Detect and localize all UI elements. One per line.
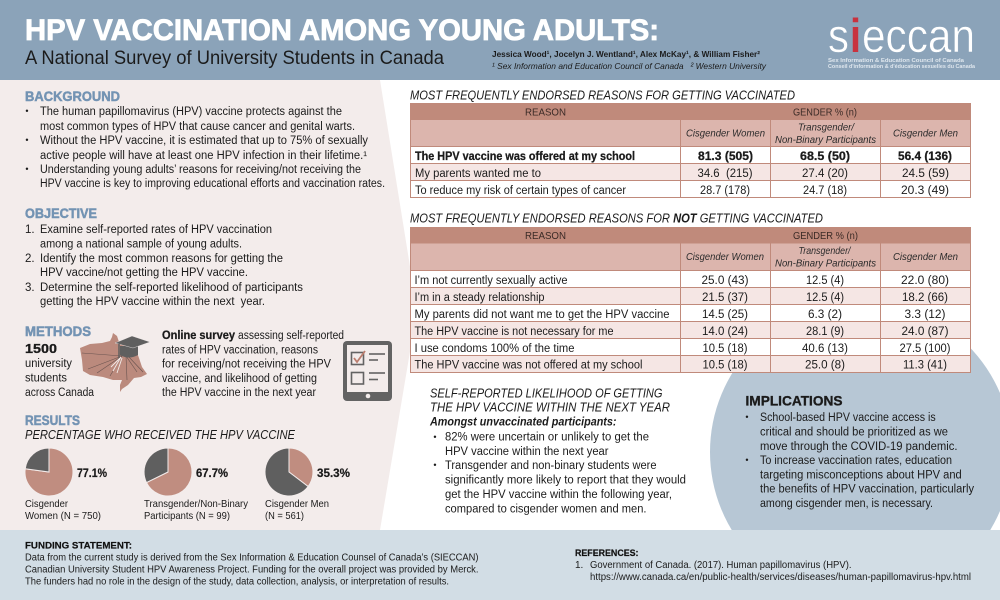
table: reasons for not getting vaccinated: 12.5 (4) bbox=[806, 292, 844, 304]
text block: background bullets: Understanding young adults’ reasons for receiving/not receiving the bbox=[40, 164, 361, 176]
text block: implications bullets bbox=[745, 412, 974, 510]
text block: background bullets: HPV vaccine is key to improving educational efforts and vaccination rates. bbox=[40, 178, 385, 190]
text block: implications bullets: • bbox=[745, 455, 749, 465]
text block: likelihood findings: get the HPV vaccine within the following year, bbox=[445, 489, 672, 501]
table: reasons for getting vaccinated: GENDER % (n) bbox=[793, 107, 857, 119]
text block: objective list: Identify the most common reasons for getting the bbox=[40, 253, 283, 265]
text block: references bbox=[575, 548, 971, 583]
heading: self-reported likelihood: SELF-REPORTED LIKELIHOOD OF GETTING bbox=[430, 386, 663, 400]
heading: self-reported likelihood bbox=[430, 386, 670, 415]
text block: funding statement bbox=[25, 540, 478, 587]
table: reasons for getting vaccinated: 34.6 (215) bbox=[698, 168, 753, 180]
table: reasons for not getting vaccinated: 40.6 (13) bbox=[802, 343, 848, 355]
table: reasons for getting vaccinated: The HPV vaccine was offered at my school bbox=[415, 151, 635, 163]
text block: online survey: assessing self-reported bbox=[238, 330, 344, 342]
table: reasons for not getting vaccinated: GENDER % (n) bbox=[793, 230, 858, 242]
table: reasons for getting vaccinated bbox=[410, 103, 971, 198]
table: reasons for not getting vaccinated: 18.2 (66) bbox=[902, 292, 948, 304]
text block: sample size: university bbox=[25, 358, 72, 370]
table: reasons for getting vaccinated: 68.5 (50) bbox=[800, 151, 850, 163]
table: reasons for getting vaccinated: Cisgender Women bbox=[686, 129, 765, 140]
text block: objective list: HPV vaccine/not getting the HPV vaccine. bbox=[40, 267, 248, 279]
subtitle: A National Survey of University Students in Canada bbox=[25, 47, 444, 69]
section: background bbox=[25, 89, 385, 190]
text block: objective list bbox=[25, 224, 303, 308]
logo: sieccan: Sex Information & Education Council of Canada bbox=[828, 58, 965, 64]
table: reasons for not getting vaccinated: 14.0 (24) bbox=[702, 326, 748, 338]
text block: implications bullets: the benefits of HPV vaccination, particularly bbox=[760, 484, 974, 496]
text block: online survey: Online survey bbox=[162, 330, 236, 342]
chart heading: percentage who received: PERCENTAGE WHO RECEIVED THE HPV VACCINE bbox=[25, 428, 296, 442]
table: reasons for getting vaccinated: 28.7 (178) bbox=[700, 185, 750, 197]
heading: results: RESULTS bbox=[25, 413, 80, 428]
pie chart: transgender/non-binary participants bbox=[144, 448, 249, 522]
table: reasons for not getting vaccinated: 12.5 (4) bbox=[806, 275, 844, 287]
pie chart: cisgender women: Cisgender bbox=[25, 498, 68, 510]
text block: likelihood findings bbox=[429, 417, 686, 516]
logo: sieccan: s bbox=[828, 9, 849, 62]
text block: background bullets: Without the HPV vaccine, it is estimated that up to 75% of sexually bbox=[40, 135, 368, 147]
icon: Canada map with graduation cap bbox=[80, 333, 150, 392]
table: reasons for not getting vaccinated: 24.0 (87) bbox=[902, 326, 949, 338]
table: reasons for not getting vaccinated: The HPV vaccine is not necessary for me bbox=[414, 326, 614, 338]
text block: sample size: students bbox=[25, 372, 67, 384]
table: reasons for not getting vaccinated: The HPV vaccine was not offered at my school bbox=[414, 360, 642, 372]
text block: implications bullets: To increase vaccination rates, education bbox=[760, 455, 952, 467]
table: reasons for not getting vaccinated: 25.0 (43) bbox=[702, 275, 749, 287]
table: reasons for getting vaccinated: Cisgender Men bbox=[893, 129, 958, 140]
text block: implications bullets: move through the COVID-19 pandemic. bbox=[760, 441, 958, 453]
panel: header bbox=[0, 0, 1000, 80]
pie chart: transgender/non-binary participants: Transgender/Non-Binary bbox=[144, 498, 249, 510]
text block: objective list: 2. bbox=[25, 253, 35, 265]
table: reasons for not getting vaccinated: I use condoms 100% of the time bbox=[414, 343, 574, 355]
text block: likelihood findings: compared to cisgender women and men. bbox=[445, 504, 646, 516]
table: reasons for not getting vaccinated: I’m not currently sexually active bbox=[414, 275, 568, 287]
pie chart: cisgender men bbox=[265, 448, 350, 522]
text block: background bullets: active people will have at least one HPV infection in their lifetime.¹ bbox=[40, 150, 367, 162]
table: reasons for not getting vaccinated: I’m in a steady relationship bbox=[414, 292, 544, 304]
table: reasons for not getting vaccinated: 10.5 (18) bbox=[702, 343, 748, 355]
table: reasons for getting vaccinated: Transgender/ bbox=[798, 123, 855, 134]
text block: objective list: 3. bbox=[25, 282, 35, 294]
text block: objective list: among a national sample of young adults. bbox=[40, 238, 242, 250]
text block: implications bullets: among cisgender men, is necessary. bbox=[760, 498, 933, 510]
pie chart: cisgender men: 35.3% bbox=[317, 468, 350, 480]
panel: implications circle bbox=[710, 301, 1000, 600]
panel: left background bbox=[0, 80, 417, 530]
pie chart: cisgender men: (N = 561) bbox=[265, 510, 304, 522]
table: reasons for not getting vaccinated: 11.3 (41) bbox=[903, 360, 947, 372]
pie chart: cisgender women: 77.1% bbox=[77, 468, 107, 480]
pie chart: cisgender women: Women (N = 750) bbox=[25, 510, 101, 522]
panel: footer band bbox=[0, 530, 1000, 600]
table: reasons for getting vaccinated: My parents wanted me to bbox=[415, 168, 541, 180]
pie chart: cisgender men: Cisgender Men bbox=[265, 498, 329, 510]
text block: references: REFERENCES: bbox=[575, 548, 638, 559]
table: reasons for getting vaccinated: 27.4 (20) bbox=[802, 168, 848, 180]
table: reasons for not getting vaccinated: Cisgender Women bbox=[686, 252, 764, 263]
section: objective bbox=[25, 206, 303, 308]
logo: sieccan bbox=[828, 9, 976, 70]
text block: objective list: Examine self-reported rates of HPV vaccination bbox=[40, 224, 272, 236]
title: HPV VACCINATION AMONG YOUNG ADULTS: bbox=[25, 14, 659, 47]
table: reasons for getting vaccinated: 24.5 (59) bbox=[902, 168, 949, 180]
table: reasons for getting vaccinated: 24.7 (18) bbox=[803, 185, 847, 197]
heading: reasons for not getting vaccinated: MOST FREQUENTLY ENDORSED REASONS FOR NOT GETTING VACCINATED bbox=[410, 211, 823, 225]
text block: references: https://www.canada.ca/en/public-health/services/diseases/human-papillomavirus-hpv.html bbox=[590, 572, 971, 583]
text block: implications bullets: • bbox=[745, 412, 749, 422]
text block: implications bullets: critical and should be prioritized as we bbox=[760, 427, 948, 439]
logo: sieccan: eccan bbox=[862, 9, 975, 62]
table: reasons for not getting vaccinated bbox=[410, 227, 971, 372]
text block: implications bullets: targeting misconceptions about HPV and bbox=[760, 470, 962, 482]
table: reasons for not getting vaccinated: 27.5 (100) bbox=[900, 343, 951, 355]
logo: sieccan: Conseil d'information & d'éducation sexuelles du Canada bbox=[828, 64, 976, 70]
text block: sample size: 1500 bbox=[25, 341, 57, 356]
text block: funding statement: Data from the current study is derived from the Sex Information & Education Counsel of Canada’s (SIECCAN) bbox=[25, 553, 478, 564]
table: reasons for not getting vaccinated: 21.5 (37) bbox=[702, 292, 748, 304]
text block: references: 1. bbox=[575, 560, 583, 571]
text block: objective list: Determine the self-reported likelihood of participants bbox=[40, 282, 303, 294]
table: reasons for not getting vaccinated: 6.3 (2) bbox=[808, 309, 842, 321]
section: self-reported likelihood bbox=[429, 386, 686, 516]
section: methods bbox=[25, 324, 392, 401]
text block: background bullets: most common types of HPV that cause cancer and genital warts. bbox=[40, 121, 355, 133]
icon: survey tablet bbox=[343, 341, 392, 401]
table: reasons for getting vaccinated: 81.3 (505) bbox=[698, 151, 753, 163]
authors: Jessica Wood¹, Jocelyn J. Wentland¹, Alex McKay¹, & William Fisher² bbox=[492, 49, 760, 59]
table: reasons for not getting vaccinated: Cisgender Men bbox=[893, 252, 958, 263]
section: implications bbox=[745, 393, 974, 510]
section: results bbox=[25, 413, 350, 522]
text block: likelihood findings: significantly more likely to report that they would bbox=[445, 474, 686, 486]
text block: online survey: rates of HPV vaccination, reasons bbox=[162, 344, 318, 356]
text block: likelihood findings: 82% were uncertain or unlikely to get the bbox=[445, 432, 649, 444]
text block: references: Government of Canada. (2017). Human papillomavirus (HPV). bbox=[590, 560, 852, 571]
text block: sample size: across Canada bbox=[25, 387, 95, 399]
logo: sieccan: i bbox=[850, 9, 861, 62]
text block: likelihood findings: HPV vaccine within the next year bbox=[445, 446, 609, 458]
text block: background bullets: • bbox=[25, 106, 29, 116]
text block: implications bullets: School-based HPV vaccine access is bbox=[760, 412, 936, 424]
text block: likelihood findings: • bbox=[433, 432, 437, 442]
text block: sample size bbox=[25, 341, 95, 399]
table: reasons for not getting vaccinated: 28.1 (9) bbox=[806, 326, 844, 338]
text block: online survey: vaccine, and likelihood of getting bbox=[162, 373, 317, 385]
table: reasons for not getting vaccinated: 3.3 (12) bbox=[904, 309, 946, 321]
heading: objective: OBJECTIVE bbox=[25, 206, 97, 221]
table: reasons for getting vaccinated: REASON bbox=[525, 107, 566, 119]
heading: methods: METHODS bbox=[25, 324, 91, 339]
text block: background bullets: The human papillomavirus (HPV) vaccine protects against the bbox=[40, 106, 342, 118]
table: reasons for not getting vaccinated: Non-Binary Participants bbox=[775, 258, 876, 270]
heading: background: BACKGROUND bbox=[25, 89, 120, 104]
pie chart: cisgender women bbox=[25, 448, 107, 522]
text block: likelihood findings: • bbox=[433, 460, 437, 470]
text block: funding statement: Canadian University Student HPV Awareness Project. Funding for the overall project was provided by Merck. bbox=[25, 565, 478, 576]
text block: likelihood findings: Amongst unvaccinated participants: bbox=[429, 417, 617, 429]
table: reasons for not getting vaccinated: 22.0 (80) bbox=[901, 275, 949, 287]
text block: likelihood findings: Transgender and non-binary students were bbox=[445, 460, 656, 472]
text block: background bullets bbox=[25, 106, 385, 190]
text block: objective list: getting the HPV vaccine within the next year. bbox=[40, 296, 265, 308]
text block: online survey: for receiving/not receiving the HPV bbox=[162, 358, 331, 370]
heading: implications: IMPLICATIONS bbox=[746, 393, 842, 409]
table: reasons for getting vaccinated: 20.3 (49) bbox=[901, 185, 949, 197]
table: reasons for getting vaccinated: 56.4 (136) bbox=[898, 151, 952, 163]
table: reasons for getting vaccinated: Non-Binary Participants bbox=[775, 135, 876, 146]
table: reasons for not getting vaccinated: 14.5 (25) bbox=[702, 309, 748, 321]
text block: background bullets: • bbox=[25, 164, 29, 174]
table: reasons for not getting vaccinated: My parents did not want me to get the HPV vaccine bbox=[414, 309, 670, 321]
text block: funding statement: The funders had no role in the design of the study, data collection, analysis, or interpretation of results. bbox=[25, 576, 449, 587]
table: reasons for getting vaccinated: To reduce my risk of certain types of cancer bbox=[415, 185, 626, 197]
text block: online survey: the HPV vaccine in the next year bbox=[162, 387, 316, 399]
table: reasons for not getting vaccinated: 25.0 (8) bbox=[805, 360, 845, 372]
affiliations: ¹ Sex Information and Education Council of Canada ² Western University bbox=[492, 61, 767, 71]
table: reasons for not getting vaccinated: 10.5 (18) bbox=[702, 360, 748, 372]
pie chart: transgender/non-binary participants: 67.7% bbox=[196, 468, 228, 480]
text block: background bullets: • bbox=[25, 135, 29, 145]
heading: reasons for getting vaccinated: MOST FREQUENTLY ENDORSED REASONS FOR GETTING VACCINATED bbox=[410, 88, 795, 102]
text block: funding statement: FUNDING STATEMENT: bbox=[25, 540, 132, 551]
text block: objective list: 1. bbox=[25, 224, 35, 236]
table: reasons for not getting vaccinated: Transgender/ bbox=[798, 246, 852, 257]
text block: online survey bbox=[162, 330, 344, 399]
pie chart: transgender/non-binary participants: Participants (N = 99) bbox=[144, 510, 230, 522]
heading: self-reported likelihood: THE HPV VACCINE WITHIN THE NEXT YEAR bbox=[430, 401, 670, 415]
table: reasons for not getting vaccinated: REASON bbox=[525, 230, 566, 242]
